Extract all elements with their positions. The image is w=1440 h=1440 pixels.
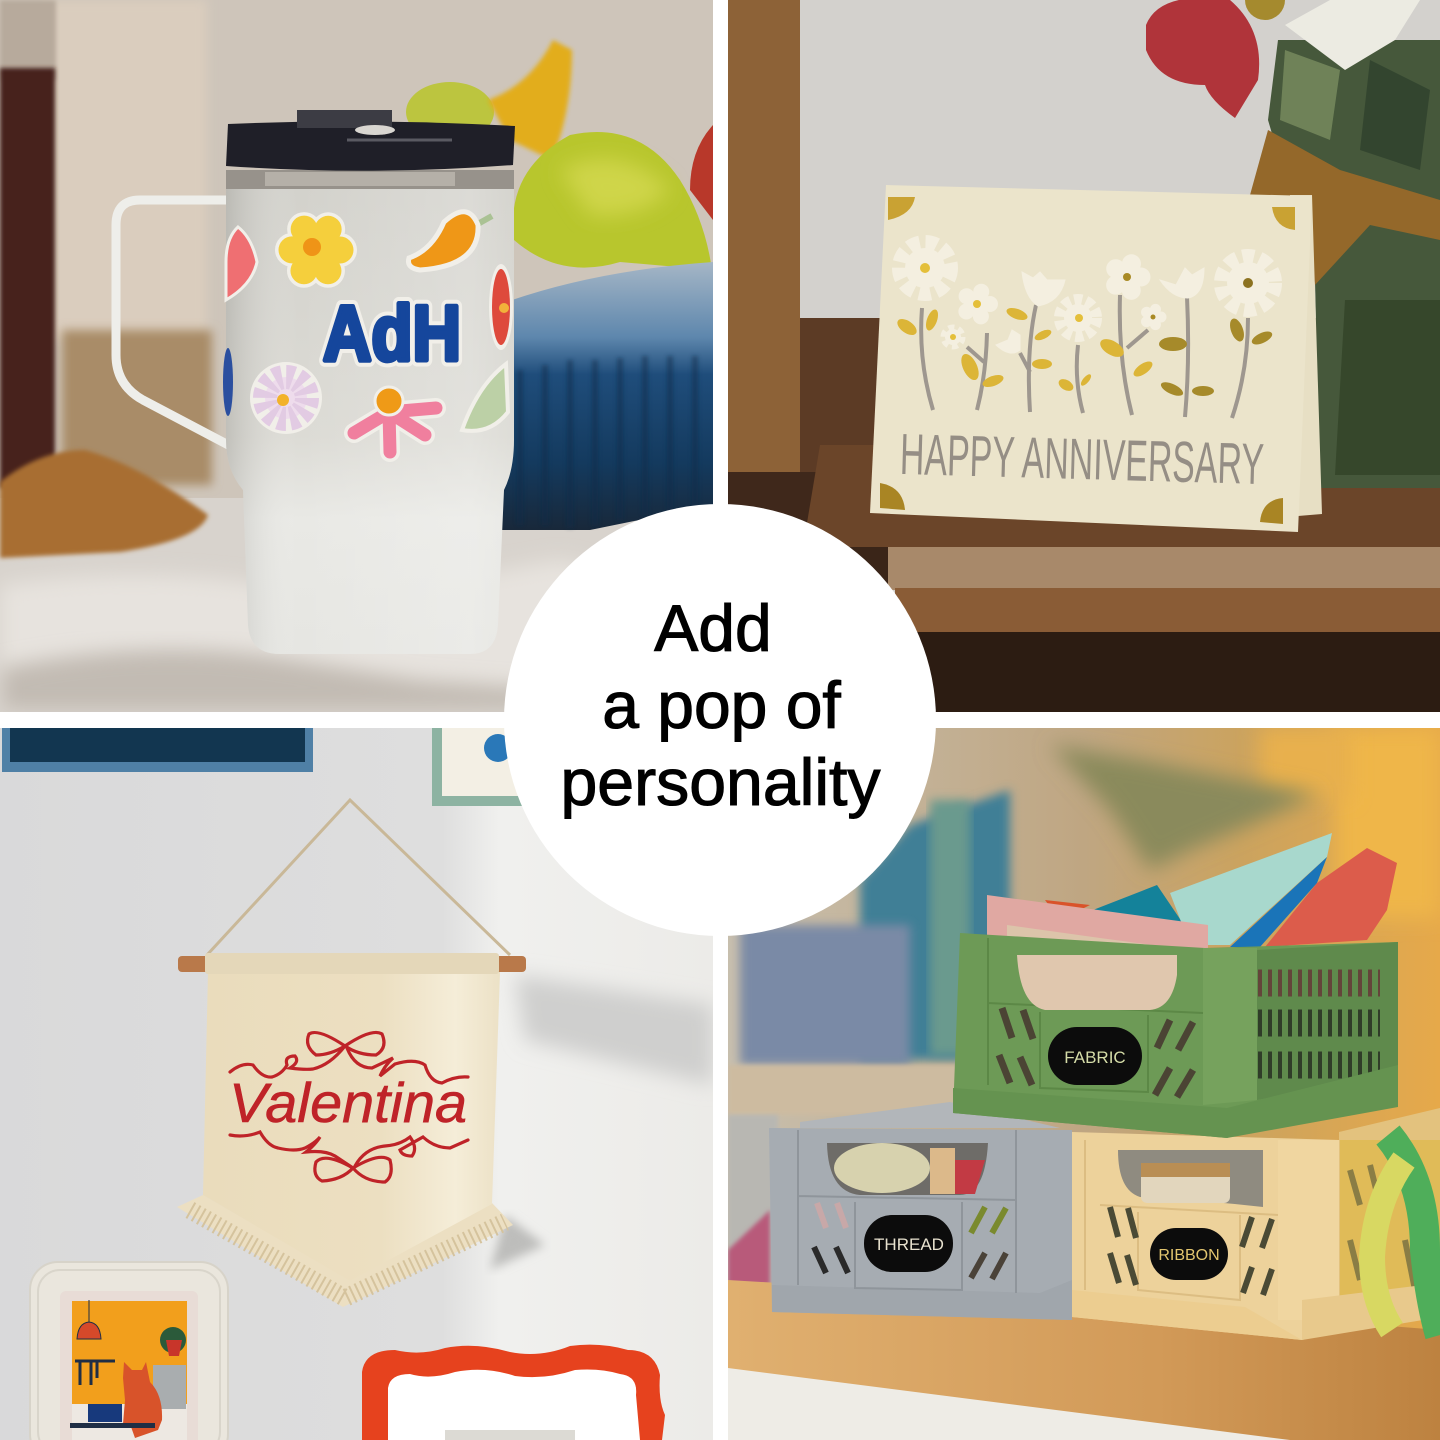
counter (0, 498, 637, 712)
green picture frame (432, 728, 522, 806)
gold corners (880, 197, 1295, 524)
sticker: pink flower (354, 387, 436, 452)
canvas banner (177, 953, 526, 1307)
crate label: RIBBON (1158, 1247, 1220, 1264)
fringe (177, 1195, 513, 1307)
mug handle (116, 200, 236, 449)
sticker: name: AdH (323, 289, 461, 377)
name lettering: Valentina (229, 1071, 467, 1134)
heading: Add (654, 591, 772, 665)
floral cutouts (895, 248, 1274, 418)
mug body (226, 170, 514, 654)
sticker: blue edge (223, 348, 233, 416)
print cat (123, 1362, 162, 1438)
sticker: yellow flower (292, 226, 340, 274)
center circle (504, 504, 936, 936)
yellow crate (1072, 1108, 1440, 1340)
sticker: orange pepper (408, 212, 492, 270)
ribbon (1250, 130, 1440, 285)
fruit (406, 40, 713, 270)
heading: personality (560, 745, 880, 819)
sticker: red tulip (226, 227, 257, 300)
red wavy frame (362, 1345, 665, 1440)
green crate (953, 933, 1398, 1138)
vase (1268, 40, 1440, 488)
print plant (160, 1327, 186, 1356)
sticker: lilac flower (250, 362, 322, 434)
cat kitchen print (30, 1262, 228, 1440)
panel: banner on wall photo (0, 728, 713, 1440)
ribbons (1372, 1135, 1440, 1335)
panel: mug photo (0, 0, 713, 712)
print lamp (77, 1300, 101, 1339)
blue picture frame (2, 728, 313, 772)
blurred books (740, 790, 1010, 1065)
panel: storage crates photo (728, 728, 1440, 1440)
crate label: FABRIC (1064, 1048, 1126, 1067)
crate label (1150, 1228, 1228, 1280)
greeting card (870, 185, 1322, 532)
panel: anniversary card photo (728, 0, 1440, 712)
sticker: red flower (489, 264, 513, 350)
red bow bottom (230, 1132, 468, 1182)
stickers on mug (223, 212, 513, 452)
heading (560, 591, 880, 819)
flowers (1146, 0, 1420, 118)
wooden dish (0, 450, 208, 558)
spice jar (0, 0, 56, 488)
print pot (88, 1404, 122, 1422)
crate label (864, 1215, 953, 1272)
red bow top (230, 1032, 468, 1083)
hanging string (207, 800, 510, 955)
grey crate (769, 1102, 1072, 1320)
sticker: name: AdH (323, 289, 461, 377)
crate label: THREAD (874, 1235, 944, 1254)
heading: a pop of (602, 668, 841, 742)
fabrics (987, 833, 1397, 950)
sticker: name (319, 297, 462, 368)
sticker: leaf (462, 364, 508, 431)
print rail (75, 1361, 115, 1385)
wood table (728, 1280, 1440, 1440)
mug lid (226, 110, 515, 171)
crate label (1048, 1027, 1142, 1085)
blue bowl (487, 262, 713, 530)
